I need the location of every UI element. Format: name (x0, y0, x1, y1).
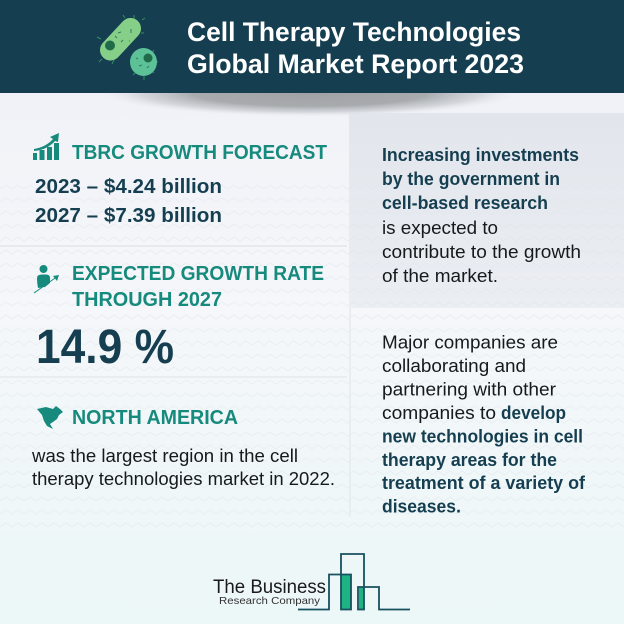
icon: bacteria cells (97, 15, 158, 80)
panel: growth rate (34, 262, 324, 374)
logo: The Business Research Company (213, 554, 410, 610)
header band (0, 0, 624, 93)
forecast values (35, 176, 222, 227)
text block: investments: cell-based research (382, 193, 548, 213)
title: Cell Therapy Technologies (187, 17, 521, 47)
round cell (130, 48, 157, 76)
heading: TBRC GROWTH FORECAST (72, 141, 327, 164)
icon: rising bar chart (33, 133, 59, 160)
text block: investments: by the government in (382, 169, 560, 189)
capsule cell (110, 28, 130, 50)
text block: collaborations: diseases (382, 496, 456, 516)
icon: person with arrow (34, 265, 59, 293)
forecast values: 2023 – $4.24 billion (35, 176, 222, 198)
panel: north america (31, 406, 335, 489)
panel: right upper tinted (349, 113, 624, 308)
heading: EXPECTED GROWTH RATE (72, 262, 324, 285)
icon: north america map (37, 406, 63, 429)
text block: collaborations: . (456, 496, 461, 516)
text block: collaborations: partnering with other (382, 380, 556, 400)
description (31, 446, 335, 489)
heading (72, 262, 324, 311)
header shadow (98, 69, 522, 117)
heading: THROUGH 2027 (72, 288, 222, 311)
growth rate value: 14.9 % (36, 321, 174, 374)
text block: investments: Increasing investments (382, 145, 579, 165)
text block: collaborations: develop (501, 403, 566, 423)
background zigzag texture (0, 180, 624, 530)
heading: NORTH AMERICA (72, 406, 238, 429)
panel: growth forecast (33, 133, 327, 227)
forecast values: 2027 – $7.39 billion (35, 205, 222, 227)
text block: investments: is expected to (382, 218, 498, 238)
description: therapy technologies market in 2022. (32, 469, 335, 489)
text block: collaborations: therapy areas for the (382, 450, 557, 470)
text block: investments: contribute to the growth (382, 242, 581, 262)
text block: collaborations: new technologies in cell (382, 426, 583, 446)
title: Global Market Report 2023 (187, 49, 524, 79)
logo: The Business Research Company: Research Company (219, 595, 321, 607)
text block: collaborations: collaborating and (382, 356, 526, 376)
text block: collaborations (382, 332, 586, 516)
text block: collaborations: companies to (382, 403, 496, 423)
text block: collaborations: Major companies are (382, 332, 558, 352)
text block: investments (382, 145, 581, 286)
description: was the largest region in the cell (31, 446, 298, 466)
logo bars (298, 554, 410, 610)
logo wordmark: The Business (213, 577, 326, 598)
text block: investments: of the market. (382, 266, 498, 286)
title (187, 17, 524, 79)
text block: collaborations: treatment of a variety of (382, 473, 586, 493)
